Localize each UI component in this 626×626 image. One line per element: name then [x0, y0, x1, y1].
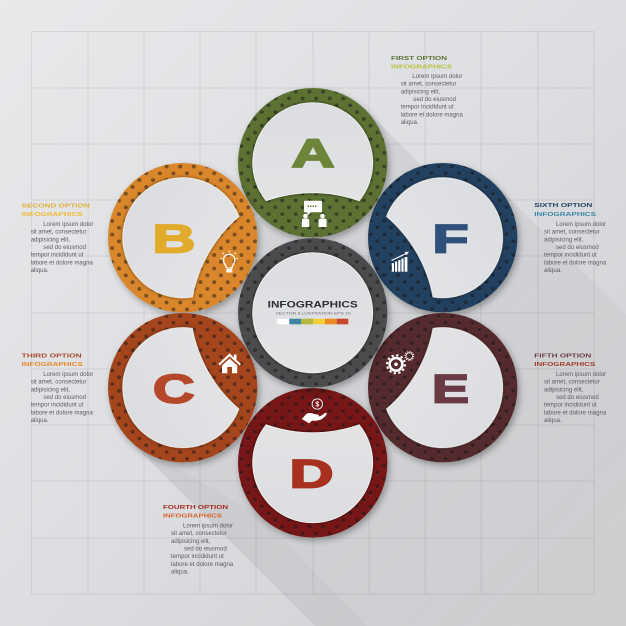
text block: fifth option: tempor incididunt ut — [544, 403, 597, 409]
center subtitle: VECTOR ILLUSTRATION EPS 10 — [276, 310, 352, 315]
long shadow — [130, 110, 626, 626]
panel: option E circle — [368, 313, 525, 470]
text block: fourth option: Lorem ipsum dolor — [183, 524, 233, 530]
text block: sixth option: adipisicing elit, — [544, 237, 584, 243]
text block: third option: labore et dolore magna — [31, 410, 94, 416]
text block: first option: adipisicing elit, — [401, 89, 440, 95]
text block: third option: tempor incididunt ut — [31, 403, 84, 409]
letter B: B — [152, 217, 196, 261]
text block: fifth option: sit amet, consectetur — [544, 380, 600, 386]
letter A: A — [292, 132, 334, 176]
text block: fourth option — [163, 505, 234, 576]
icon: light bulb — [220, 250, 238, 272]
text block: sixth option: tempor incididunt ut — [544, 253, 597, 259]
text block: third option: aliqua. — [31, 418, 49, 424]
text block: fifth option: Lorem ipsum dolor — [556, 372, 606, 378]
icon: hand holding coin: $ — [315, 402, 319, 408]
text block: third option: sit amet, consectetur — [31, 380, 86, 386]
panel: option C circle — [101, 313, 257, 470]
text block: sixth option: aliqua. — [544, 268, 562, 274]
text block: first option: sed do eiusmod — [413, 97, 456, 103]
text block: third option: adipisicing elit, — [31, 387, 70, 393]
letter E: E — [432, 367, 469, 411]
text block: sixth option: labore et dolore magna — [544, 260, 607, 266]
text block: first option: INFOGRAPHICS — [391, 64, 452, 70]
text block: sixth option: sit amet, consectetur — [544, 230, 600, 236]
letter C: C — [153, 367, 194, 411]
text block: second option: sed do eiusmod — [43, 245, 86, 251]
text block: first option: sit amet, consectetur — [401, 82, 456, 88]
center title: INFOGRAPHICS — [268, 300, 358, 310]
text block: first option: labore et dolore magna — [401, 112, 464, 118]
text block: first option: FIRST OPTION — [391, 56, 447, 62]
panel: option F circle — [368, 156, 525, 312]
text block: third option: Lorem ipsum dolor — [43, 372, 93, 378]
text block: fifth option: labore et dolore magna — [544, 410, 607, 416]
text block: second option: SECOND OPTION — [22, 204, 90, 210]
text block: first option: tempor incididunt ut — [401, 105, 454, 111]
text block: third option: THIRD OPTION — [22, 354, 82, 360]
icon: people talking — [302, 201, 327, 227]
color bar — [277, 319, 348, 324]
letter D: D — [290, 452, 334, 496]
text block: fourth option: sed do eiusmod — [184, 546, 227, 552]
text block: second option: adipisicing elit, — [31, 237, 70, 243]
icon: gears — [387, 352, 414, 373]
text block: third option: INFOGRAPHICS — [22, 362, 83, 368]
text block: fifth option: aliqua. — [544, 418, 562, 424]
text block: fifth option: FIFTH OPTION — [534, 354, 591, 360]
text block: second option: tempor incididunt ut — [31, 253, 84, 259]
text block: first option: aliqua. — [401, 120, 419, 126]
text block: sixth option: Lorem ipsum dolor — [556, 222, 606, 228]
text block: sixth option — [534, 203, 607, 274]
panel: option A circle — [238, 88, 387, 237]
text block: fifth option: INFOGRAPHICS — [534, 362, 596, 368]
text block: fourth option: adipisicing elit, — [171, 539, 211, 545]
icon: rising bar chart — [392, 252, 409, 272]
icon: hand holding coin — [302, 399, 327, 423]
text block: sixth option: INFOGRAPHICS — [534, 212, 596, 218]
text block: fourth option: aliqua. — [171, 570, 189, 576]
text block: second option — [22, 204, 94, 274]
text block: fifth option: sed do eiusmod — [556, 395, 599, 401]
text block: fourth option: FOURTH OPTION — [163, 505, 228, 511]
text block: sixth option: sed do eiusmod — [556, 245, 599, 251]
text block: third option — [22, 354, 94, 424]
text block: fifth option: adipisicing elit, — [544, 387, 584, 393]
icon: house — [218, 353, 241, 373]
panel: option B circle — [101, 156, 257, 312]
panel: center circle — [238, 238, 387, 388]
text block: third option: sed do eiusmod — [43, 395, 86, 401]
text block: fourth option: labore et dolore magna — [171, 562, 234, 568]
text block: second option: aliqua. — [31, 268, 49, 274]
text block: second option: INFOGRAPHICS — [22, 212, 83, 218]
text block: second option: sit amet, consectetur — [31, 230, 86, 236]
text block: second option: Lorem ipsum dolor — [43, 222, 93, 228]
letter F: F — [432, 217, 468, 261]
text block: fourth option: tempor incididunt ut — [171, 554, 224, 560]
text block: first option: Lorem ipsum dolor — [412, 74, 462, 80]
text block: second option: labore et dolore magna — [31, 260, 94, 266]
text block: first option — [391, 56, 464, 126]
text block: sixth option: SIXTH OPTION — [534, 203, 592, 209]
text block: fourth option: sit amet, consectetur — [171, 531, 227, 537]
panel: option D circle — [238, 388, 387, 538]
text block: fifth option — [534, 354, 607, 424]
text block: fourth option: INFOGRAPHICS — [163, 514, 222, 520]
